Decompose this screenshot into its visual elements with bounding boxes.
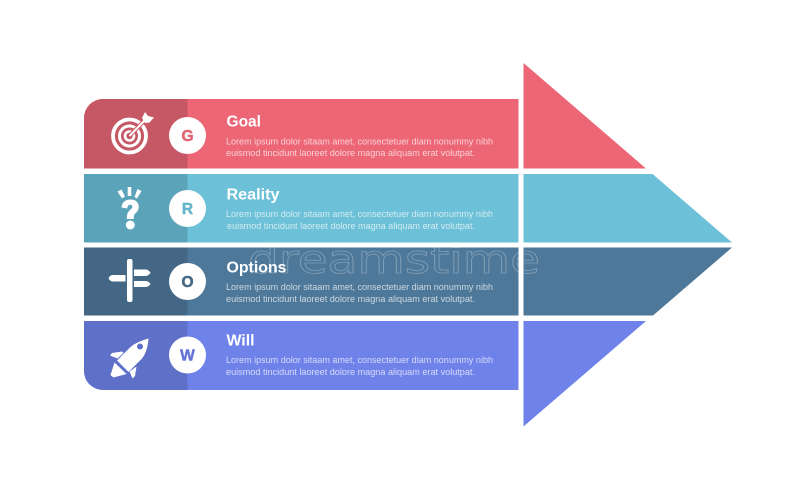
letter badge O: O [181, 274, 194, 291]
Will bar [84, 321, 518, 390]
Reality bar [84, 174, 518, 242]
description Will: euismod tincidunt laoreet dolore magna aliquam erat volutpat. [226, 367, 475, 378]
arrowhead segment: Reality [524, 174, 732, 242]
description Options: Lorem ipsum dolor sitaam amet, consectetuer diam nonummy nibh [226, 282, 493, 293]
description Options: euismod tincidunt laoreet dolore magna aliquam erat volutpat. [226, 294, 475, 305]
letter badge G [169, 117, 206, 154]
row: Goal [84, 99, 518, 168]
arrowhead segment: Goal [524, 63, 646, 168]
arrowhead segment: Will [524, 321, 646, 426]
description Reality: Lorem ipsum dolor sitaam amet, consectetuer diam nonummy nibh [226, 209, 493, 220]
Options dark icon panel [84, 248, 188, 316]
icon: signpost [108, 259, 150, 302]
row: Will [84, 321, 518, 390]
letter badge W: W [180, 348, 195, 364]
description Goal: euismod tincidunt laoreet dolore magna aliquam erat volutpat. [226, 148, 475, 159]
letter badge G: G [181, 128, 194, 145]
Options bar [84, 248, 518, 316]
description Reality: euismod tincidunt laoreet dolore magna aliquam erat volutpat. [227, 221, 475, 232]
description Will: Lorem ipsum dolor sitaam amet, consectetuer diam nonummy nibh [226, 355, 493, 366]
watermark: dreamstime [248, 238, 540, 283]
icon: target [113, 112, 154, 152]
Will dark icon panel [84, 321, 188, 390]
arrowhead segment: Options [524, 248, 732, 316]
letter badge R [169, 190, 206, 227]
letter badge W [169, 336, 206, 374]
heading Reality: Reality [226, 186, 280, 204]
icon: question mark [118, 187, 142, 230]
row: Reality [84, 174, 518, 242]
description Goal: Lorem ipsum dolor sitaam amet, consectetuer diam nonummy nibh [226, 136, 493, 148]
heading Options: Options [226, 260, 286, 276]
Reality dark icon panel [84, 174, 188, 242]
letter badge R: R [182, 201, 193, 218]
Goal bar [84, 99, 518, 168]
Goal dark icon panel [84, 99, 188, 168]
heading Goal: Goal [226, 114, 261, 130]
arrowhead [524, 63, 732, 426]
row: Options [84, 248, 518, 316]
heading Will: Will [226, 332, 254, 350]
letter badge O [169, 263, 206, 300]
icon: rocket [110, 338, 148, 378]
